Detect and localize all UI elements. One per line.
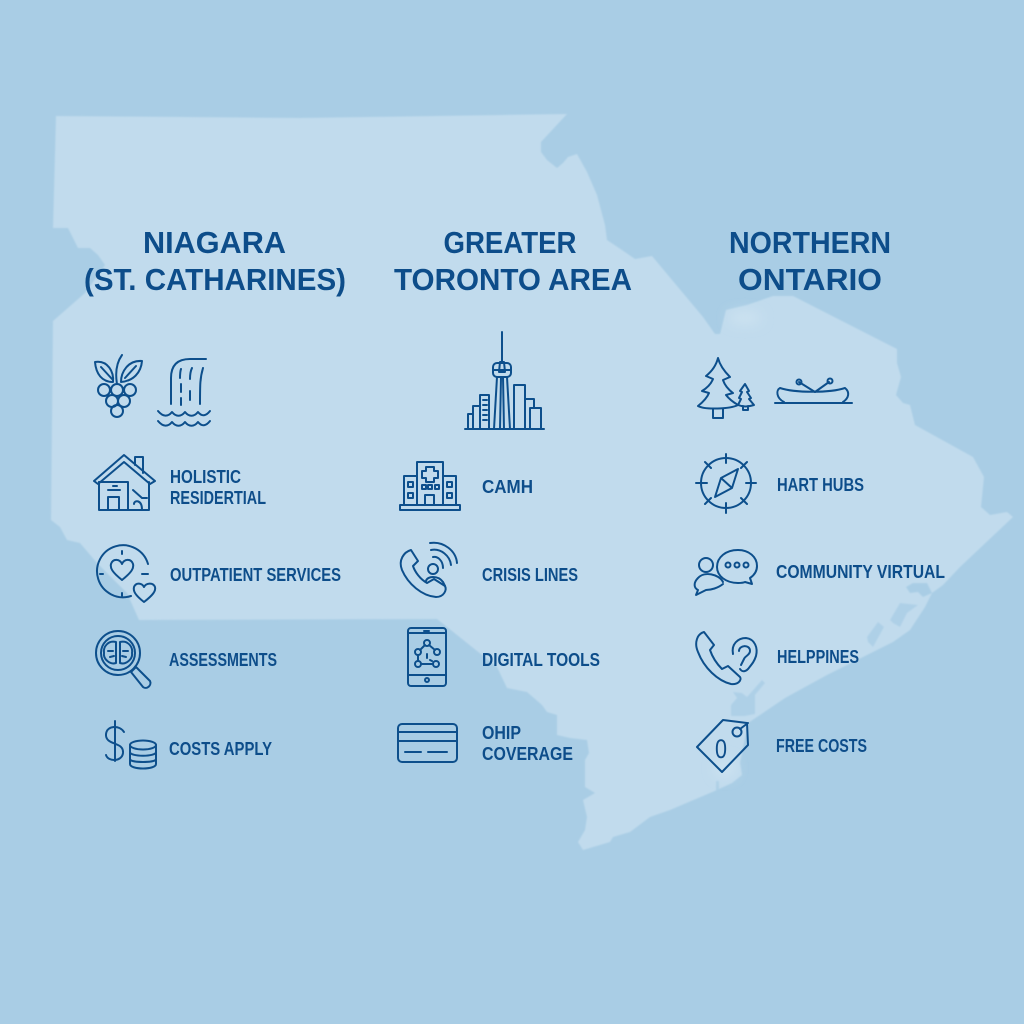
label: assessments: ASSESSMENTS	[169, 650, 277, 670]
icon: pine trees	[698, 358, 754, 418]
label: holistic residential: RESIDERTIAL	[170, 488, 266, 508]
title: Niagara: (ST. CATHARINES)	[84, 263, 346, 297]
title: Greater Toronto Area	[394, 226, 632, 297]
map of Ontario	[51, 114, 1013, 850]
label: CAMH: CAMH	[482, 477, 533, 497]
icon: grapes	[95, 355, 142, 417]
icon: card	[398, 724, 457, 762]
icon: hospital	[400, 462, 460, 510]
title: Northern Ontario: NORTHERN	[729, 226, 891, 260]
label: holistic residential	[170, 467, 266, 508]
icon: phone and ear	[696, 632, 757, 684]
label: crisis lines: CRISIS LINES	[482, 565, 578, 585]
icon: CN Tower skyline	[465, 332, 544, 429]
icon: price tag	[697, 720, 748, 772]
title: Northern Ontario: ONTARIO	[738, 263, 882, 297]
icon: community chat	[695, 550, 757, 595]
label: OHIP coverage: OHIP	[482, 723, 521, 743]
title: Greater Toronto Area: TORONTO AREA	[394, 263, 632, 297]
icon: waterfall	[158, 359, 210, 426]
label: OHIP coverage: COVERAGE	[482, 744, 573, 764]
icon: tablet	[408, 628, 446, 686]
label: OHIP coverage	[482, 723, 573, 764]
column: Niagara	[94, 355, 341, 768]
label: holistic residential: HOLISTIC	[170, 467, 241, 487]
icon: magnifier with brain	[96, 631, 150, 688]
map highlights	[715, 312, 761, 777]
title: Niagara	[84, 226, 346, 297]
icon: dollar and coins	[106, 721, 156, 768]
label: costs apply: COSTS APPLY	[169, 739, 272, 759]
icon: compass	[696, 454, 756, 513]
lakes and islands	[906, 583, 932, 597]
title: Northern Ontario	[729, 226, 891, 297]
icon: canoe	[775, 378, 852, 403]
label: community virtual: COMMUNITY VIRTUAL	[776, 562, 945, 582]
icon: phone with signal	[401, 543, 457, 597]
label: HART hubs: HART HUBS	[777, 475, 864, 495]
column: Greater Toronto Area	[398, 332, 600, 764]
label: digital tools: DIGITAL TOOLS	[482, 650, 600, 670]
label: free costs: FREE COSTS	[776, 736, 867, 756]
icon: house	[94, 455, 155, 510]
column: Northern Ontario	[695, 358, 945, 772]
icon: clock with hearts	[97, 545, 155, 602]
title: Niagara: NIAGARA	[143, 226, 286, 260]
title: Greater Toronto Area: GREATER	[444, 226, 576, 260]
label: helplines: HELPPINES	[777, 647, 859, 667]
label: outpatient services: OUTPATIENT SERVICES	[170, 565, 341, 585]
icon: price tag: 0	[715, 734, 727, 764]
